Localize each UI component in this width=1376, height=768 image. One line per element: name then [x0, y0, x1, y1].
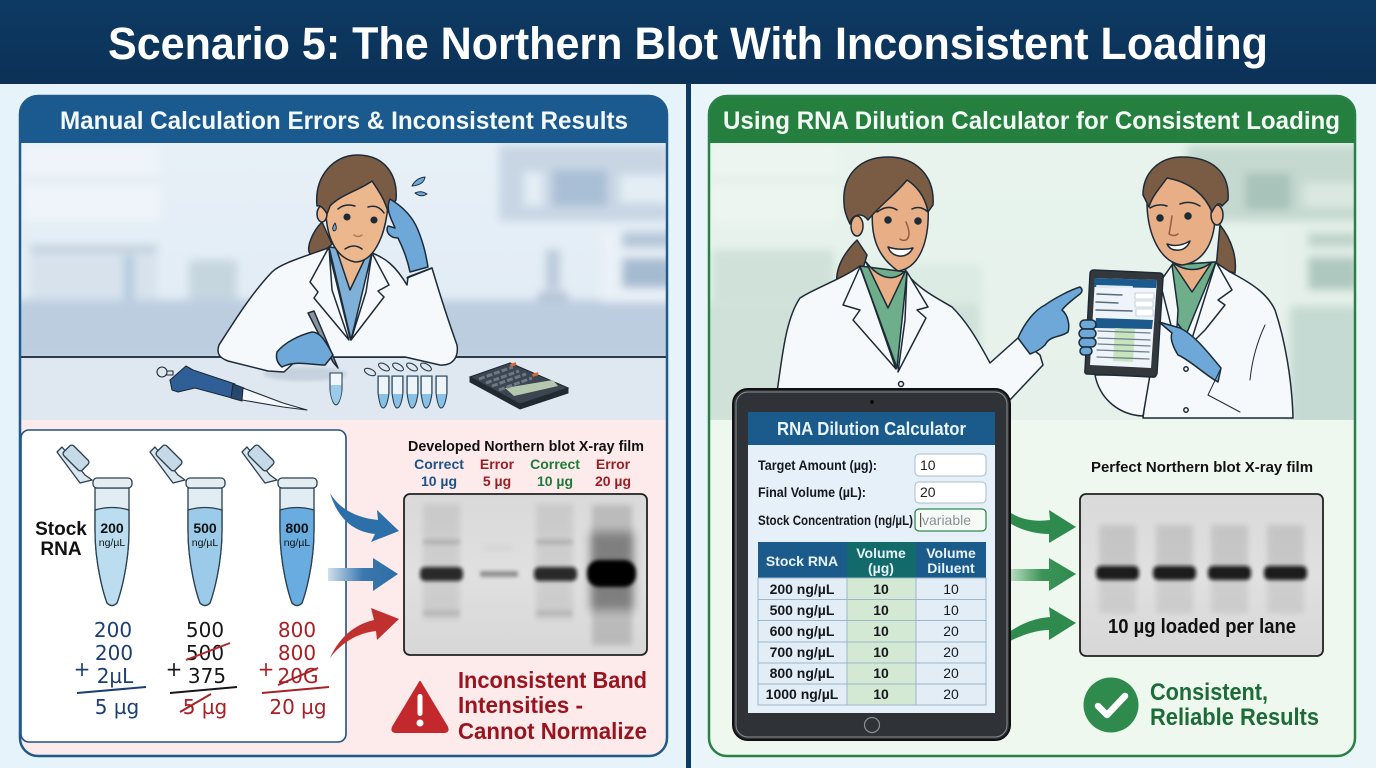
sweat drops: [412, 177, 427, 196]
handwritten sum: 800: +: [258, 657, 274, 681]
arrows: tablet to film: [1008, 510, 1076, 642]
icon: pipette: [157, 366, 307, 410]
input fields: variable: [922, 512, 971, 528]
shirt: [860, 266, 907, 368]
results table: 10: [873, 581, 889, 597]
panel: stock RNA tubes: [21, 430, 346, 742]
tube: 500 ng/uL: ng/µL: [192, 537, 218, 549]
lapels: [843, 267, 896, 369]
results table: 700 ng/µL: [770, 644, 835, 660]
face features: [877, 207, 928, 256]
tube: 200 ng/uL: 200: [100, 520, 124, 536]
result text: Consistent,: [1150, 679, 1268, 706]
results table: 10: [873, 665, 889, 681]
uniform lanes: [1096, 525, 1307, 613]
results table: 10: [873, 686, 889, 702]
handwritten sum: 500: 375: [188, 664, 226, 688]
panel heading: left: [20, 96, 667, 143]
tube: 500 ng/uL: 500: [193, 520, 217, 536]
results table: Diluent: [927, 560, 975, 576]
panel heading: right: Using RNA Dilution Calculator for Consistent Loading: [723, 107, 1340, 135]
screen title: RNA Dilution Calculator: [777, 419, 966, 439]
lane labels: [414, 456, 631, 489]
coat button: [898, 382, 904, 386]
handwritten sum: 200: 200: [94, 618, 132, 642]
film heading: Developed Northern blot X-ray film: [408, 438, 644, 455]
handwritten sum: 200: 200: [95, 641, 133, 665]
icon: calculator: [470, 362, 568, 409]
results table: 200 ng/µL: [770, 581, 835, 597]
handwritten sum: 500: +: [166, 657, 182, 681]
hair: [1143, 157, 1228, 212]
shirt: [329, 247, 372, 340]
tube: 200 ng/uL: ng/µL: [99, 537, 125, 549]
head: [1147, 176, 1215, 265]
panel heading: right: [709, 96, 1355, 143]
film caption: 10 µg loaded per lane: [1108, 616, 1296, 638]
handwritten sum: 200: 2µL: [97, 664, 134, 688]
handwritten sum: 500: 500: [186, 618, 224, 642]
lab coat: [218, 248, 457, 372]
lanes: [420, 504, 636, 645]
lane labels: Correct: [530, 456, 580, 472]
pointing glove: [1018, 287, 1082, 354]
results table: 20: [943, 686, 959, 702]
lane labels: 10 µg: [537, 473, 573, 489]
screen: [748, 412, 995, 713]
collar and lapel: [1162, 264, 1179, 327]
center divider: [686, 83, 691, 768]
pointing glove: [1159, 322, 1221, 382]
input labels: [758, 457, 913, 528]
results table: 800 ng/µL: [770, 665, 835, 681]
hair: [317, 155, 396, 214]
results table: 10: [943, 581, 959, 597]
tube: 200 ng/uL: [57, 444, 132, 606]
tube: 800 ng/uL: ng/µL: [284, 537, 310, 549]
illustration: smiling scientist pointing: [777, 157, 1082, 402]
result text: [1150, 679, 1319, 731]
label: stock RNA: RNA: [40, 539, 82, 560]
small tablet: [1085, 270, 1163, 377]
chart: developed northern blot film: [404, 494, 647, 655]
header banner with title: Scenario 5: The Northern Blot With Inconsistent Loading: [108, 18, 1268, 69]
face features: [338, 205, 384, 249]
results table: 600 ng/µL: [770, 623, 835, 639]
results table: 10: [943, 602, 959, 618]
icon: single microtube: [330, 373, 342, 405]
scene: blurred lab background: [700, 143, 1362, 426]
tube: 800 ng/uL: [242, 444, 317, 606]
icon: check mark: [1084, 678, 1138, 732]
hair: [844, 157, 933, 224]
ponytail: [837, 240, 867, 285]
lane labels: Error: [596, 456, 631, 472]
results table: Stock RNA: [766, 553, 838, 569]
panel heading: left: Manual Calculation Errors & Inconsistent Results: [60, 107, 628, 135]
lane labels: Error: [480, 456, 515, 472]
lapels: [310, 247, 349, 340]
lab coat: [1143, 262, 1293, 418]
handwritten sum: 800: 20 µg: [269, 695, 327, 719]
label: stock RNA: Stock: [35, 519, 87, 540]
illustration: scientist holding tablet: [1079, 157, 1293, 418]
ponytail: [1216, 225, 1235, 273]
handwritten sum: 200: [74, 618, 146, 719]
results table: 20: [943, 644, 959, 660]
arrows: tubes to film: [328, 493, 399, 658]
results table: 10: [873, 644, 889, 660]
input fields: 10: [920, 457, 936, 473]
lab coat: [777, 266, 1043, 402]
input labels: Stock Concentration (ng/µL): [758, 512, 913, 528]
tube: 800 ng/uL: 800: [285, 520, 309, 536]
head: [872, 178, 928, 271]
warning text: Intensities -: [458, 692, 583, 718]
results table: 10: [873, 623, 889, 639]
tube: 500 ng/uL: [150, 444, 225, 606]
handwritten sum: 800: 800: [278, 641, 316, 665]
handwritten sum: 200: 5 µg: [95, 695, 139, 719]
results table: Volume: [856, 545, 906, 561]
results table: Volume: [926, 545, 976, 561]
panel: manual calculation errors: [15, 96, 675, 756]
scene: lab bench background: [15, 143, 675, 420]
raised gloved hand: [387, 199, 428, 272]
handwritten sum: 800: 20G: [278, 664, 318, 688]
results table: 20: [943, 665, 959, 681]
handwritten sum: 200: +: [74, 657, 90, 681]
results table: (µg): [868, 560, 894, 576]
shirt: [1172, 262, 1216, 335]
header banner with title: [0, 0, 1376, 84]
input fields: [915, 454, 986, 531]
result text: Reliable Results: [1150, 704, 1319, 731]
writing hand and pen: [308, 311, 338, 368]
warning icon: [392, 682, 448, 732]
handwritten sum: 500: [166, 618, 237, 719]
icon: row of tubes: [363, 361, 447, 408]
face features: [1150, 202, 1200, 250]
holding fingers: [1079, 320, 1096, 355]
lane labels: Correct: [414, 456, 464, 472]
sleeve cuff: [407, 268, 432, 278]
lane labels: 20 µg: [595, 473, 631, 489]
results table: 500 ng/µL: [770, 602, 835, 618]
film heading: perfect: Perfect Northern blot X-ray film: [1091, 459, 1313, 476]
screen title: [748, 412, 995, 445]
illustration: worried scientist: [218, 155, 457, 372]
results table: 10: [873, 602, 889, 618]
chart: perfect northern blot film: [1080, 494, 1323, 656]
input labels: Target Amount (µg):: [758, 457, 877, 473]
warning text: [458, 667, 647, 744]
head: [326, 178, 388, 262]
panel: RNA dilution calculator: [700, 96, 1362, 756]
warning text: Inconsistent Band: [458, 667, 647, 693]
results table: 20: [943, 623, 959, 639]
warning text: Cannot Normalize: [458, 718, 647, 744]
handwritten sum: 500: 5 µg: [183, 695, 227, 719]
lane labels: 10 µg: [421, 473, 457, 489]
input fields: 20: [920, 484, 936, 500]
results table: 1000 ng/µL: [766, 686, 839, 702]
ponytail: [309, 222, 332, 254]
handwritten sum: 800: 800: [278, 618, 316, 642]
results table: [758, 542, 986, 705]
handwritten sum: 800: [258, 618, 329, 719]
tablet: RNA dilution calculator: [733, 389, 1010, 740]
handwritten sum: 500: 500: [186, 641, 224, 665]
lane labels: 5 µg: [483, 473, 511, 489]
input labels: Final Volume (µL):: [758, 484, 866, 500]
